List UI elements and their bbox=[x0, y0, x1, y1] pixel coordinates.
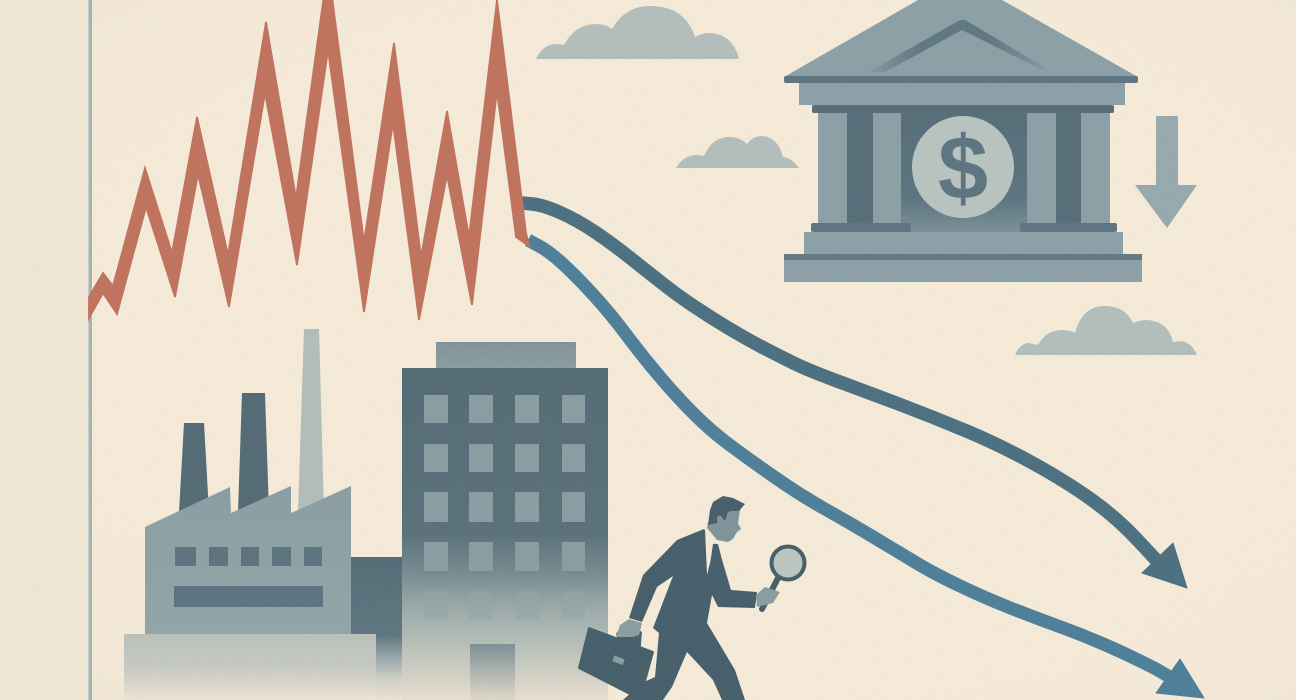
cloud: small middle bbox=[676, 136, 799, 168]
building roof bbox=[436, 342, 576, 368]
dollar coin: $ bbox=[938, 119, 988, 219]
bank steps bbox=[804, 232, 1123, 254]
businessman with magnifying glass bbox=[579, 496, 804, 700]
bank columns bbox=[818, 113, 1110, 223]
foreground wall bbox=[124, 634, 376, 700]
building door bbox=[470, 644, 515, 700]
bank cornice bbox=[784, 76, 1138, 83]
cloud: right bbox=[1015, 306, 1197, 355]
falling trend arrow: lower bbox=[528, 240, 1204, 698]
icon: down arrow bbox=[1135, 116, 1197, 228]
suit and legs bbox=[623, 529, 757, 700]
factory body with sawtooth roof bbox=[145, 486, 351, 634]
bank entablature bbox=[799, 83, 1125, 105]
hair bbox=[708, 496, 745, 525]
bank pediment bbox=[784, 0, 1138, 77]
chart axis bbox=[88, 0, 92, 700]
briefcase bbox=[579, 628, 653, 695]
connector block bbox=[351, 557, 403, 700]
volatile red line chart bbox=[89, 0, 529, 320]
face bbox=[707, 510, 741, 542]
hand holding magnifier bbox=[756, 587, 780, 607]
cloud: top centre bbox=[536, 6, 739, 59]
hand holding briefcase bbox=[616, 619, 642, 637]
building tower bbox=[402, 368, 608, 700]
office building bbox=[402, 342, 608, 700]
tie bbox=[708, 544, 722, 578]
factory windows bbox=[174, 547, 323, 607]
building windows bbox=[424, 395, 585, 619]
magnifying glass bbox=[762, 546, 804, 609]
chimneys bbox=[179, 329, 324, 512]
icon: bank building bbox=[784, 0, 1142, 282]
column bases bbox=[811, 223, 1117, 232]
pediment inner chevron bbox=[868, 20, 1046, 72]
falling trend arrow: upper bbox=[522, 203, 1187, 588]
dollar coin bbox=[912, 116, 1014, 219]
bank dark interior bbox=[847, 113, 1081, 232]
shirt collar bbox=[705, 529, 715, 575]
factory bbox=[145, 329, 351, 634]
